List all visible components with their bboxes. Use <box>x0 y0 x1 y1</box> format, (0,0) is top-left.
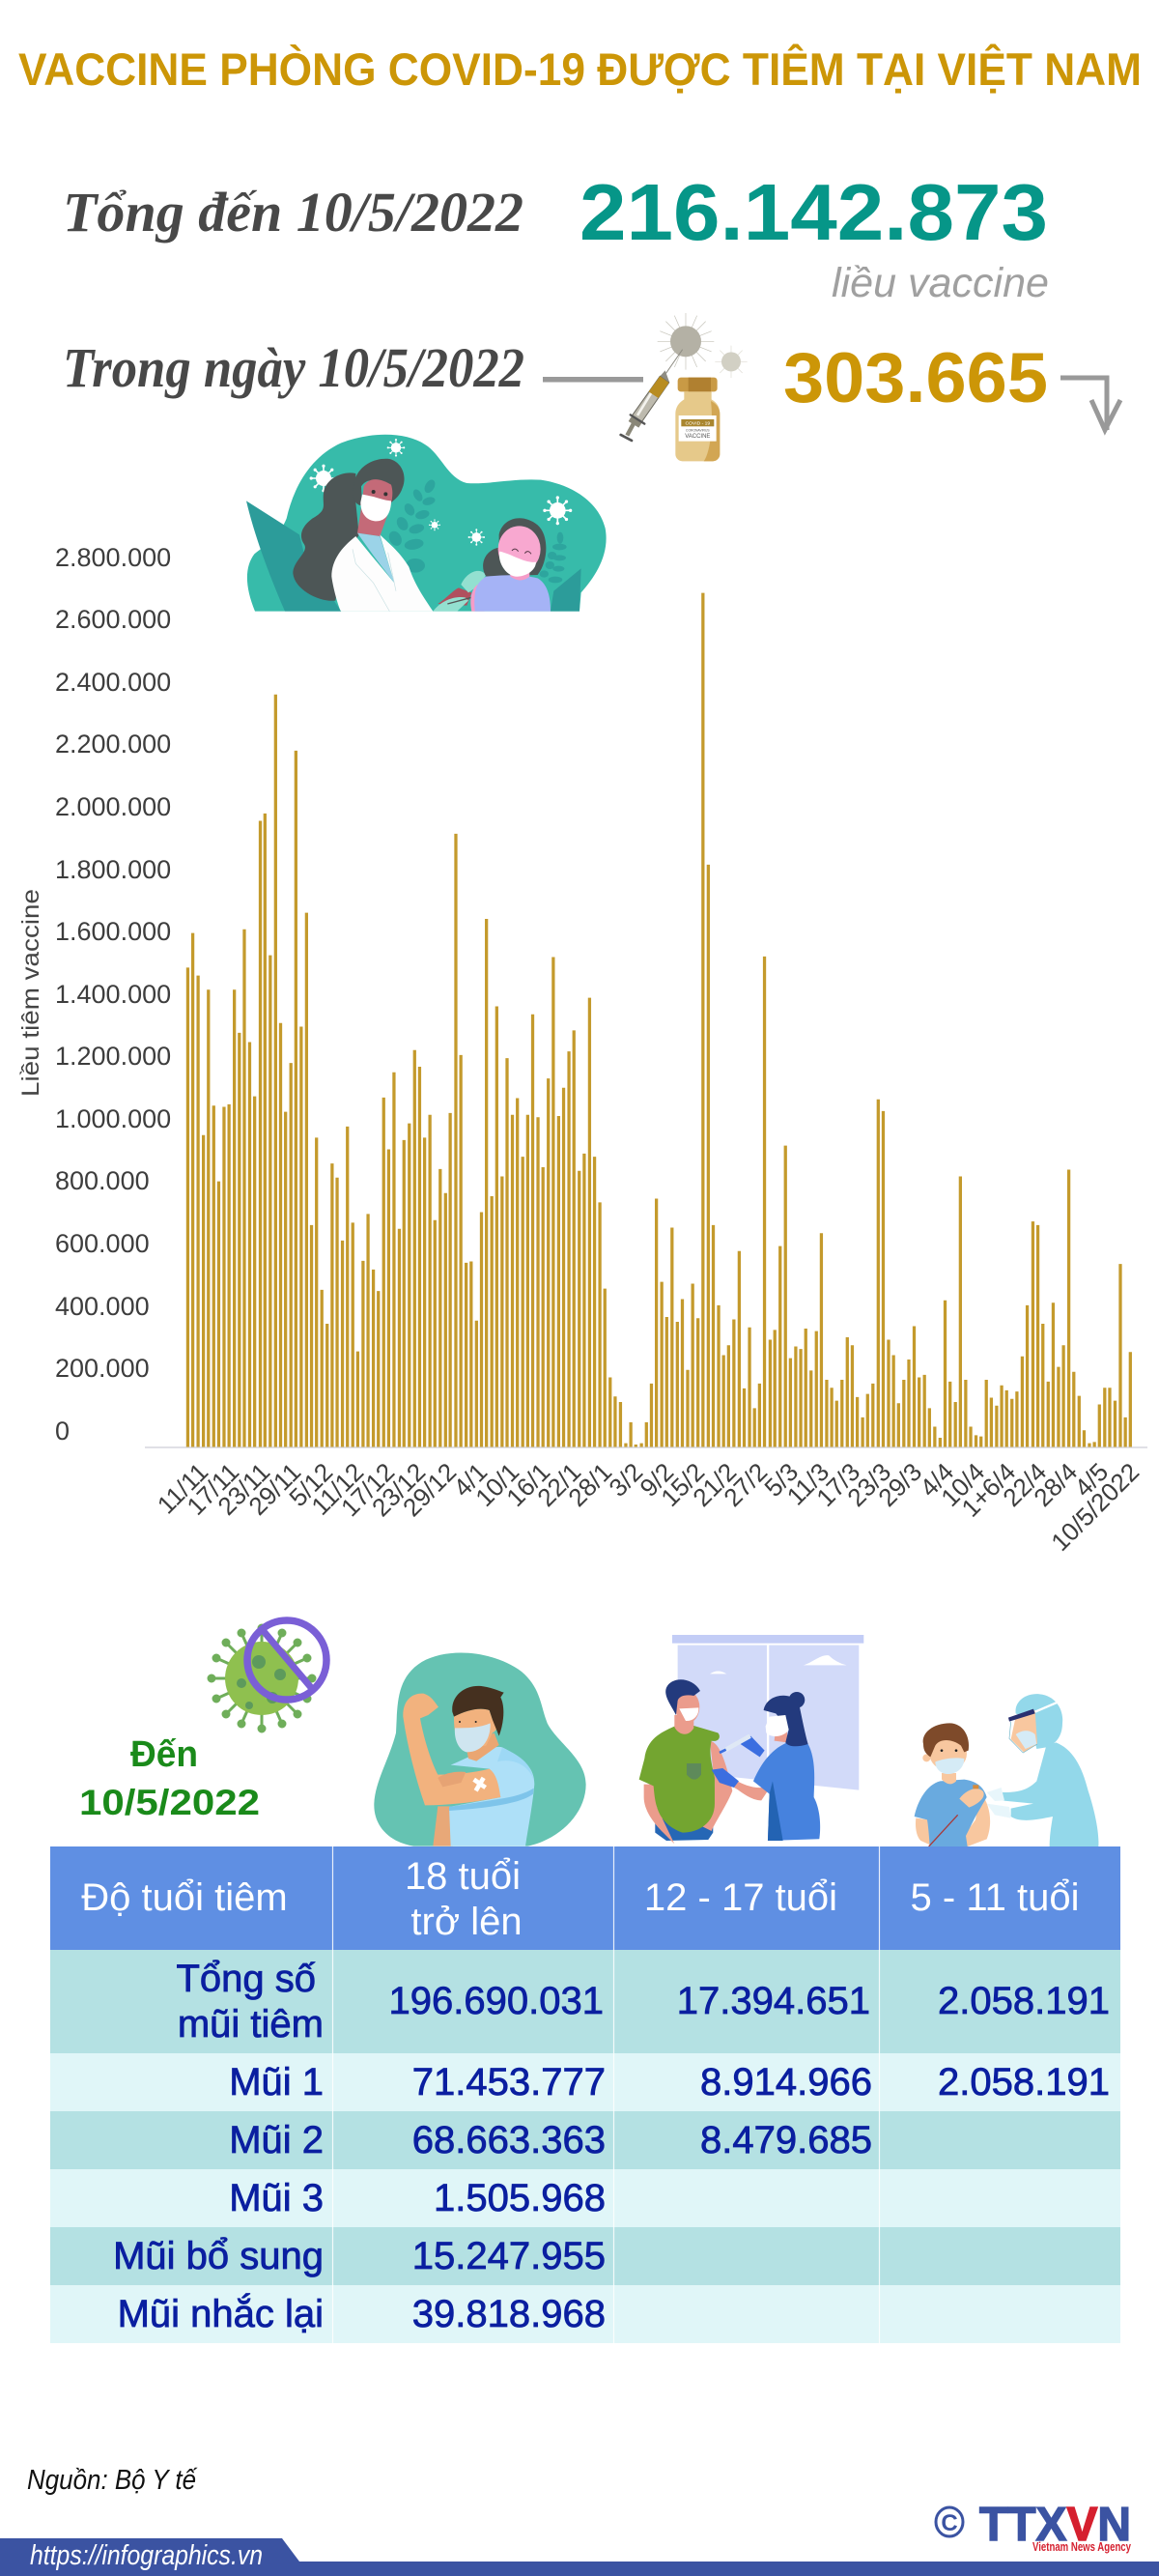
row: dose 1: 8.914.966 <box>700 2061 872 2104</box>
row: total: Tổng số <box>176 1958 316 2000</box>
footer band <box>0 2538 1159 2576</box>
row: total: 2.058.191 <box>938 1980 1110 2022</box>
x-axis labels: 11/11 <box>152 1457 213 1520</box>
date label: 10/5/2022 <box>79 1783 260 1822</box>
illustration: adult with bandage <box>374 1653 586 1846</box>
row: total: 17.394.651 <box>677 1980 870 2022</box>
date label <box>79 1734 260 1822</box>
x-axis labels: 22/4 <box>997 1457 1052 1512</box>
row: additional dose <box>113 2235 606 2277</box>
y-axis labels: 400.000 <box>55 1292 150 1321</box>
x-axis labels: 9/2 <box>634 1457 679 1503</box>
connector line <box>543 377 643 383</box>
table backgrounds <box>50 1846 1120 2343</box>
child <box>915 1723 990 1846</box>
logo: TTXVN: C <box>941 2510 958 2536</box>
x-axis labels: 3/2 <box>603 1457 648 1503</box>
y-axis labels: 1.400.000 <box>55 980 171 1009</box>
row: total: 196.690.031 <box>389 1980 604 2022</box>
table header <box>81 1855 1079 1943</box>
x-axis labels: 11/3 <box>781 1457 834 1511</box>
icon: small virus <box>715 346 748 378</box>
x-axis labels: 1+6/4 <box>956 1457 1021 1523</box>
x-axis labels: 23/12 <box>366 1457 431 1522</box>
row: total <box>176 1958 1110 2046</box>
icon: vaccine vial: VACCINE <box>685 434 710 440</box>
illustration: child vaccinated by medic <box>915 1694 1098 1846</box>
icon: crossed-out virus <box>209 1620 326 1732</box>
x-axis labels: 10/4 <box>935 1457 990 1512</box>
row: dose 2: 8.479.685 <box>700 2119 872 2161</box>
x-axis labels <box>152 1457 1145 1557</box>
illustration: doctor vaccinating child <box>246 435 607 612</box>
table header: Độ tuổi tiêm <box>81 1876 288 1919</box>
x-axis labels: 29/11 <box>242 1457 306 1521</box>
illustration: teen vaccinated by nurse <box>639 1635 863 1844</box>
x-axis labels: 5/3 <box>758 1457 804 1503</box>
y-axis labels: 2.400.000 <box>55 668 171 697</box>
x-axis labels: 17/11 <box>181 1457 244 1521</box>
row: dose 1: Mũi 1 <box>229 2061 324 2104</box>
y-axis labels: 600.000 <box>55 1229 150 1258</box>
table header: 5 - 11 tuổi <box>911 1876 1079 1919</box>
row: dose 1: 71.453.777 <box>412 2061 606 2104</box>
row: dose 1: 2.058.191 <box>938 2061 1110 2104</box>
doctor <box>293 459 486 612</box>
x-axis labels: 28/4 <box>1028 1457 1083 1512</box>
icon: vaccine vial: CORONAVIRUS <box>686 429 710 433</box>
source note: Nguồn: Bộ Y tế <box>27 2465 198 2496</box>
row: dose 2: Mũi 2 <box>229 2119 324 2161</box>
row: dose 2: 68.663.363 <box>412 2119 606 2161</box>
y-axis labels: 2.600.000 <box>55 605 171 634</box>
row: total: mũi tiêm <box>178 2003 324 2046</box>
x-axis labels: 10/1 <box>469 1457 524 1512</box>
icon: vaccine vial <box>675 378 720 461</box>
icon: vaccine vial: COVID - 19 <box>685 421 710 427</box>
teen <box>639 1679 732 1844</box>
x-axis labels: 28/1 <box>562 1457 617 1512</box>
total label: Tổng đến 10/5/2022 <box>63 181 523 243</box>
man <box>403 1686 534 1846</box>
x-axis labels: 23/3 <box>841 1457 896 1512</box>
bar chart: daily vaccine doses <box>17 543 1147 1557</box>
y-axis labels: 1.800.000 <box>55 855 171 884</box>
icon: vaccine vial, syringe and viruses <box>621 313 748 461</box>
window <box>672 1635 863 1790</box>
x-axis labels: 21/2 <box>687 1457 742 1512</box>
x-axis labels: 10/5/2022 <box>1045 1457 1145 1557</box>
x-axis labels: 5/12 <box>283 1457 338 1512</box>
x-axis labels: 15/2 <box>655 1457 710 1512</box>
bars: first part <box>187 695 636 1447</box>
y-axis labels: 1.200.000 <box>55 1042 171 1071</box>
daily label: Trong ngày 10/5/2022 <box>63 336 524 399</box>
unit label: liều vaccine <box>832 260 1049 306</box>
row: dose 3 <box>229 2177 606 2219</box>
footer url: https://infographics.vn <box>30 2540 263 2571</box>
blob background <box>247 435 607 612</box>
row: dose 2 <box>229 2119 872 2161</box>
row: dose 3: Mũi 3 <box>229 2177 324 2219</box>
table: doses by age group <box>50 1846 1120 2343</box>
blob <box>374 1653 586 1846</box>
arrow <box>1060 378 1120 430</box>
row: dose 1 <box>229 2061 1110 2104</box>
x-axis labels: 29/12 <box>397 1457 462 1522</box>
row: additional dose: Mũi bổ sung <box>113 2235 324 2277</box>
icon: syringe <box>621 350 683 441</box>
child <box>470 518 551 612</box>
y-axis labels: 200.000 <box>55 1354 150 1383</box>
y-axis labels: 800.000 <box>55 1166 150 1195</box>
y-axis labels: 2.800.000 <box>55 543 171 572</box>
x-axis labels: 17/12 <box>335 1457 400 1522</box>
icon: big virus <box>658 313 714 370</box>
row: booster dose: Mũi nhắc lại <box>118 2292 324 2335</box>
row: booster dose <box>118 2292 606 2335</box>
x-axis labels: 4/4 <box>914 1457 959 1503</box>
y-axis labels: 0 <box>55 1417 70 1445</box>
logo: TTXVN: TTXVN <box>979 2499 1131 2551</box>
row: booster dose: 39.818.968 <box>412 2293 606 2335</box>
y-axis labels: 1.000.000 <box>55 1104 171 1133</box>
table header: 12 - 17 tuổi <box>644 1876 837 1919</box>
x-axis labels: 17/3 <box>810 1457 865 1512</box>
y-axis title: Liều tiêm vaccine <box>17 889 44 1097</box>
y-axis labels: 2.000.000 <box>55 792 171 821</box>
daily number: 303.665 <box>783 339 1048 417</box>
total number: 216.142.873 <box>580 167 1048 257</box>
x-axis labels: 22/1 <box>531 1457 586 1512</box>
nurse <box>712 1692 820 1841</box>
x-axis labels: 29/3 <box>872 1457 927 1512</box>
x-axis labels: 23/11 <box>212 1457 275 1521</box>
x-axis labels: 4/1 <box>447 1457 493 1503</box>
row: additional dose: 15.247.955 <box>412 2235 606 2277</box>
table header: trở lên <box>410 1901 523 1943</box>
date label: Đến <box>130 1734 198 1775</box>
row: dose 3: 1.505.968 <box>434 2177 606 2219</box>
x-axis labels: 16/1 <box>500 1457 555 1512</box>
viruses <box>310 439 572 546</box>
bars: second part <box>641 593 1130 1447</box>
medic <box>987 1694 1098 1846</box>
leaves <box>246 478 581 612</box>
y-axis labels: 1.600.000 <box>55 917 171 946</box>
x-axis labels: 11/12 <box>305 1457 369 1521</box>
x-axis labels: 27/2 <box>718 1457 773 1512</box>
table header: 18 tuổi <box>405 1855 521 1898</box>
axis baseline <box>145 1446 1147 1448</box>
x-axis labels: 4/5 <box>1068 1457 1114 1503</box>
y-axis labels: 2.200.000 <box>55 730 171 758</box>
y-axis labels <box>55 543 171 1445</box>
